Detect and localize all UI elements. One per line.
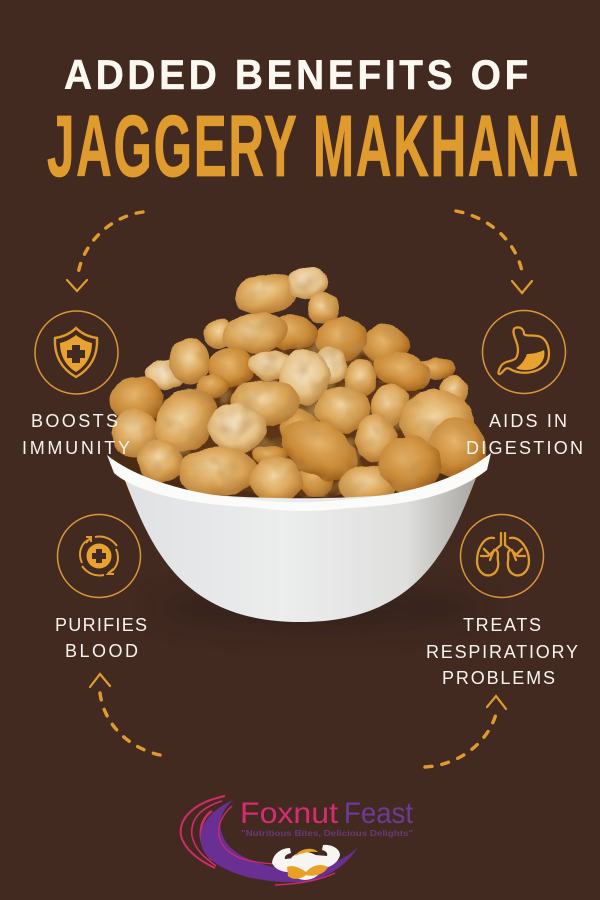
product: bowl of makhana [107,267,491,630]
label: boosts immunity: BOOSTS [31,411,118,431]
label: treats respiratory problems: RESPIRATIORY [426,642,578,662]
bowl body [124,478,476,622]
icon: blood circulation [58,514,140,598]
logo swooshes [181,796,358,885]
label: treats respiratory problems: TREATS [463,615,541,635]
logo: foxnut feast [181,796,414,885]
label: purifies blood [55,615,147,661]
logo mascot [272,845,340,880]
bowl back [112,437,488,500]
icon: lungs [460,514,544,598]
makhana pile [111,267,487,505]
label: aids in digestion [466,411,583,458]
icon: stomach [482,310,566,394]
heading: added benefits of: ADDED BENEFITS OF [64,51,532,98]
label: treats respiratory problems [426,615,578,688]
label: purifies blood: BLOOD [65,641,138,661]
icon: shield [35,311,118,394]
logo: foxnut feast: Feast [344,797,414,830]
label: boosts immunity: IMMUNITY [22,438,130,458]
label: aids in digestion: DIGESTION [466,438,583,458]
label: boosts immunity [22,411,130,458]
bowl rim [107,453,491,511]
arrow: bottom left [90,674,165,756]
label: treats respiratory problems: PROBLEMS [442,668,555,688]
arrow: top right [456,211,532,293]
bowl shadow [155,586,485,630]
arrow: top left [67,212,143,291]
label: aids in digestion: AIDS IN [489,411,567,431]
label: purifies blood: PURIFIES [55,615,147,635]
logo tagline: "Nutritious Bites, Delicious Delights" [241,829,413,838]
logo wordmark: Foxnut [240,797,339,830]
title [47,51,580,195]
arrow: bottom right [425,696,506,767]
